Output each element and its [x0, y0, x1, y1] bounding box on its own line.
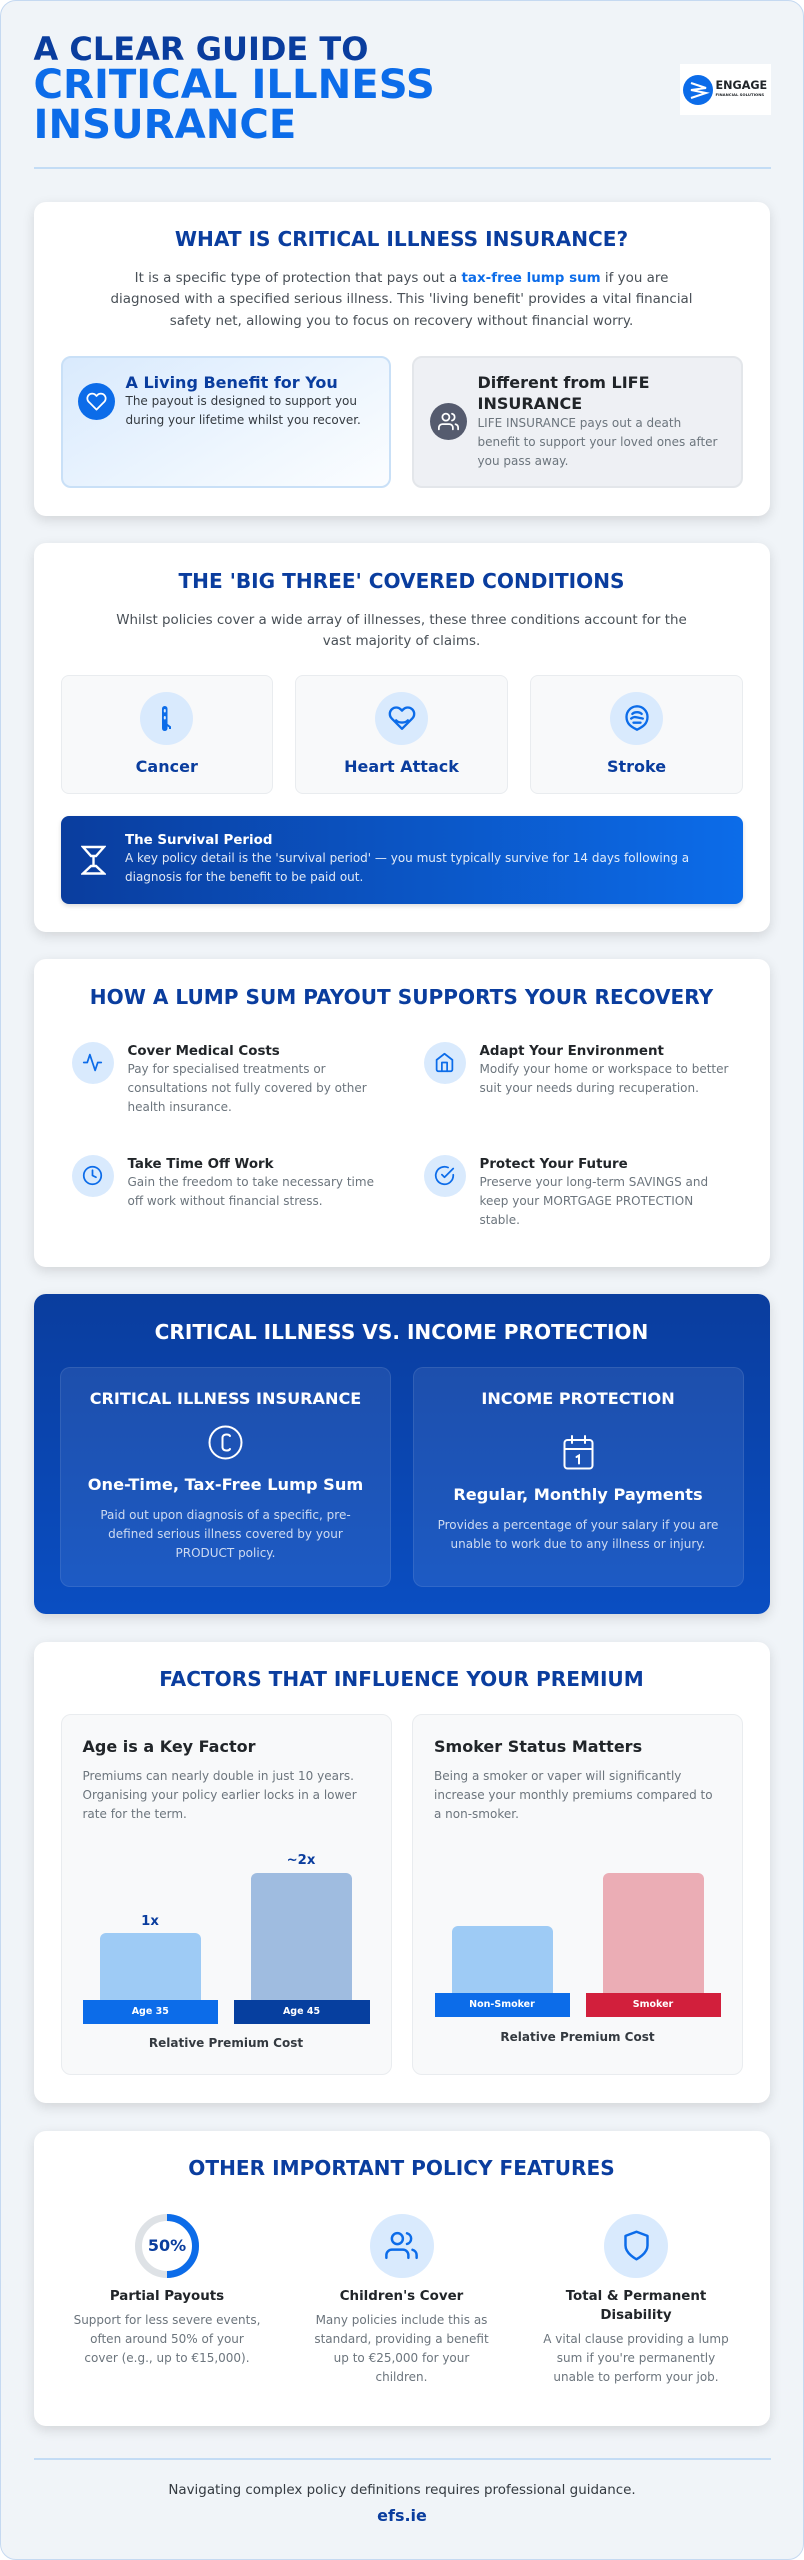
feature: total and permanent disability — [543, 2214, 729, 2384]
item: protect future — [424, 1155, 708, 1227]
item text: Modify your home or workspace to better — [480, 1062, 728, 1076]
card text — [478, 416, 718, 468]
card title: INCOME PROTECTION — [481, 1388, 675, 1408]
card: heart attack — [295, 674, 508, 794]
logo: Engage Financial Solutions: FINANCIAL SOLUTIONS — [716, 92, 764, 96]
intro text: diagnosed with a specified serious illness. This 'living benefit' provides a vital financial — [110, 292, 693, 307]
item title: Protect Your Future — [480, 1156, 628, 1172]
item title: Take Time Off Work — [128, 1156, 274, 1172]
panel: what is critical illness insurance — [34, 202, 770, 516]
bar: smoker — [602, 1872, 704, 1992]
item text: Pay for specialised treatments or — [128, 1062, 326, 1076]
label: age 35: Age 35 — [132, 2006, 169, 2016]
item text — [128, 1175, 374, 1208]
card heading: INSURANCE — [478, 394, 582, 413]
card text: Provides a percentage of your salary if you are — [438, 1518, 718, 1532]
card text: during your lifetime whilst you recover. — [126, 413, 361, 427]
card text: LIFE INSURANCE pays out a death — [478, 416, 681, 430]
heading: HOW A LUMP SUM PAYOUT SUPPORTS YOUR RECOVERY — [90, 984, 713, 1008]
item: time off work — [72, 1155, 374, 1208]
feature text: Support for less severe events, — [74, 2313, 260, 2327]
label: Cancer — [136, 756, 198, 776]
card text: unable to work due to any illness or injury. — [450, 1537, 706, 1551]
card: critical illness insurance — [60, 1366, 391, 1586]
feature text: often around 50% of your — [90, 2332, 244, 2346]
icon: people — [370, 2214, 434, 2278]
card title: Smoker Status Matters — [434, 1736, 642, 1756]
item: adapt environment — [424, 1042, 728, 1095]
feature text: Many policies include this as — [316, 2313, 487, 2327]
label: Stroke — [607, 756, 666, 776]
heading: THE 'BIG THREE' COVERED CONDITIONS — [178, 568, 625, 592]
bar chart: age — [83, 1852, 370, 2050]
item title: Adapt Your Environment — [480, 1044, 664, 1058]
item text — [480, 1175, 708, 1227]
card text: Being a smoker or vaper will significantly — [434, 1769, 681, 1783]
label: smoker — [586, 1992, 720, 2016]
icon: 50% ring: 50% — [148, 2236, 186, 2254]
label: smoker: Smoker — [633, 1998, 673, 2010]
item text: keep your MORTGAGE PROTECTION — [480, 1194, 693, 1208]
item title: Cover Medical Costs — [128, 1044, 280, 1058]
heading: WHAT IS CRITICAL ILLNESS INSURANCE? — [175, 226, 628, 250]
label: non-smoker: Non-Smoker — [469, 1998, 535, 2010]
card title: CRITICAL ILLNESS INSURANCE — [90, 1388, 361, 1408]
logo: Engage Financial Solutions: ENGAGE — [716, 78, 767, 92]
feature text: sum if you're permanently — [557, 2351, 715, 2365]
feature text — [74, 2289, 260, 2365]
title: CRITICAL ILLNESS — [34, 62, 435, 108]
icon: pulse — [72, 1042, 114, 1084]
title — [34, 30, 435, 148]
card heading: A Living Benefit for You — [126, 373, 338, 392]
feature text — [543, 2289, 729, 2384]
card text: rate for the term. — [82, 1807, 187, 1821]
card text: benefit to support your loved ones after — [478, 435, 718, 449]
heading: OTHER IMPORTANT POLICY FEATURES — [188, 2156, 615, 2180]
card text: a non-smoker. — [434, 1807, 519, 1821]
card: age factor — [60, 1714, 392, 2074]
item text: Preserve your long-term SAVINGS and — [480, 1175, 708, 1189]
card text: you pass away. — [478, 454, 568, 468]
callout heading: The Survival Period — [125, 832, 272, 848]
icon: clock — [72, 1154, 114, 1196]
card text: Paid out upon diagnosis of a specific, pre- — [100, 1508, 351, 1522]
icon: cancer — [140, 692, 193, 744]
item text — [480, 1062, 728, 1095]
label: age 45 — [234, 2000, 370, 2024]
card title: Age is a Key Factor — [82, 1736, 255, 1756]
card text: The payout is designed to support you — [126, 394, 357, 408]
card text: Premiums can nearly double in just 10 years. — [82, 1769, 354, 1783]
icon: home — [424, 1042, 466, 1084]
item text: off work without financial stress. — [128, 1194, 323, 1208]
icon: coin — [208, 1426, 242, 1460]
card: smoker status — [412, 1714, 743, 2074]
intro text — [110, 270, 693, 329]
heading: FACTORS THAT INFLUENCE YOUR PREMIUM — [159, 1666, 644, 1690]
card subheading: Regular, Monthly Payments — [453, 1484, 703, 1504]
intro text: It is a specific type of protection that pays out a tax-free lump sum if you are — [135, 270, 668, 286]
bar: non-smoker — [452, 1926, 552, 1992]
item text: consultations not fully covered by other — [128, 1081, 367, 1095]
card: income protection — [412, 1366, 744, 1586]
card text: PRODUCT policy. — [176, 1546, 276, 1560]
feature text — [314, 2289, 489, 2384]
website: efs.ie — [377, 2506, 427, 2524]
card text: increase your monthly premiums compared to — [434, 1788, 713, 1802]
panel: big three conditions — [34, 542, 770, 932]
icon: heart — [78, 382, 114, 420]
callout text: diagnosis for the benefit to be paid out. — [125, 870, 363, 884]
footer text: Navigating complex policy definitions requires professional guidance. — [168, 2482, 636, 2498]
title: INSURANCE — [34, 102, 296, 148]
card text — [100, 1508, 351, 1560]
label: age 45: Age 45 — [283, 2006, 320, 2016]
icon: hourglass — [81, 846, 106, 875]
card: stroke — [530, 674, 743, 794]
feature: children's cover — [314, 2214, 489, 2384]
item text: Gain the freedom to take necessary time — [128, 1175, 374, 1189]
label: Heart Attack — [344, 756, 459, 776]
value: 1x: 1x — [141, 1914, 159, 1928]
value: ~2x: ~2x — [287, 1852, 315, 1868]
feature text: unable to perform your job. — [553, 2370, 719, 2384]
chart caption: Relative Premium Cost — [500, 2030, 655, 2044]
card heading: Different from LIFE — [478, 373, 650, 392]
panel: critical illness vs income protection — [34, 1294, 770, 1614]
callout text: A key policy detail is the 'survival period' — you must typically survive for 14 days following a — [125, 851, 689, 865]
card text: defined serious illness covered by your — [108, 1527, 343, 1541]
feature text: Total & Permanent — [566, 2289, 706, 2304]
label: age 35 — [82, 2000, 218, 2024]
icon: 50% ring — [135, 2214, 199, 2278]
icon: heart attack — [375, 692, 428, 744]
intro text — [116, 612, 687, 649]
feature text: Disability — [600, 2308, 672, 2323]
feature text: standard, providing a benefit — [314, 2332, 489, 2346]
logo: Engage Financial Solutions — [680, 64, 770, 114]
bar: age 45 — [250, 1872, 352, 2000]
feature text: children. — [376, 2370, 427, 2384]
icon: calendar — [564, 1435, 594, 1470]
item text: health insurance. — [128, 1100, 232, 1114]
intro text: safety net, allowing you to focus on recovery without financial worry. — [170, 314, 633, 329]
footer — [168, 2482, 636, 2524]
feature text: cover (e.g., up to €15,000). — [84, 2351, 250, 2365]
intro text: vast majority of claims. — [323, 634, 480, 649]
icon: shield — [604, 2214, 668, 2278]
card subheading: One-Time, Tax-Free Lump Sum — [88, 1474, 363, 1494]
card: cancer — [60, 674, 273, 794]
card: a living benefit — [60, 356, 391, 488]
item text — [128, 1062, 367, 1114]
card text — [438, 1518, 718, 1551]
chart caption: Relative Premium Cost — [149, 2036, 303, 2050]
panel: how a lump sum supports recovery — [34, 958, 770, 1266]
bar: age 35 — [100, 1932, 200, 2000]
panel: premium factors — [34, 1642, 770, 2102]
feature text: Children's Cover — [340, 2289, 463, 2304]
icon: people — [430, 402, 466, 440]
panel: other policy features — [34, 2130, 770, 2426]
feature text: up to €25,000 for your — [334, 2351, 469, 2365]
callout: survival period — [60, 816, 742, 904]
icon: check circle — [424, 1154, 466, 1196]
card text — [82, 1769, 357, 1821]
callout text — [125, 851, 689, 884]
title: A CLEAR GUIDE TO — [34, 30, 368, 68]
feature: partial payouts — [74, 2214, 260, 2365]
card text: Organising your policy earlier locks in a lower — [82, 1788, 357, 1802]
card heading — [478, 373, 650, 413]
heading: CRITICAL ILLNESS VS. INCOME PROTECTION — [155, 1320, 648, 1344]
card: different from life insurance — [412, 356, 743, 488]
item text: stable. — [480, 1213, 520, 1227]
item: medical costs — [72, 1042, 367, 1114]
card text — [434, 1769, 713, 1821]
bar chart: smoker — [435, 1873, 721, 2044]
icon: stroke — [610, 692, 663, 744]
label: non-smoker — [434, 1992, 570, 2016]
feature text: Partial Payouts — [110, 2289, 224, 2304]
intro text: Whilst policies cover a wide array of illnesses, these three conditions account for the — [116, 612, 687, 628]
item text: suit your needs during recuperation. — [480, 1081, 699, 1095]
card text — [125, 394, 361, 427]
feature text: A vital clause providing a lump — [543, 2332, 729, 2346]
